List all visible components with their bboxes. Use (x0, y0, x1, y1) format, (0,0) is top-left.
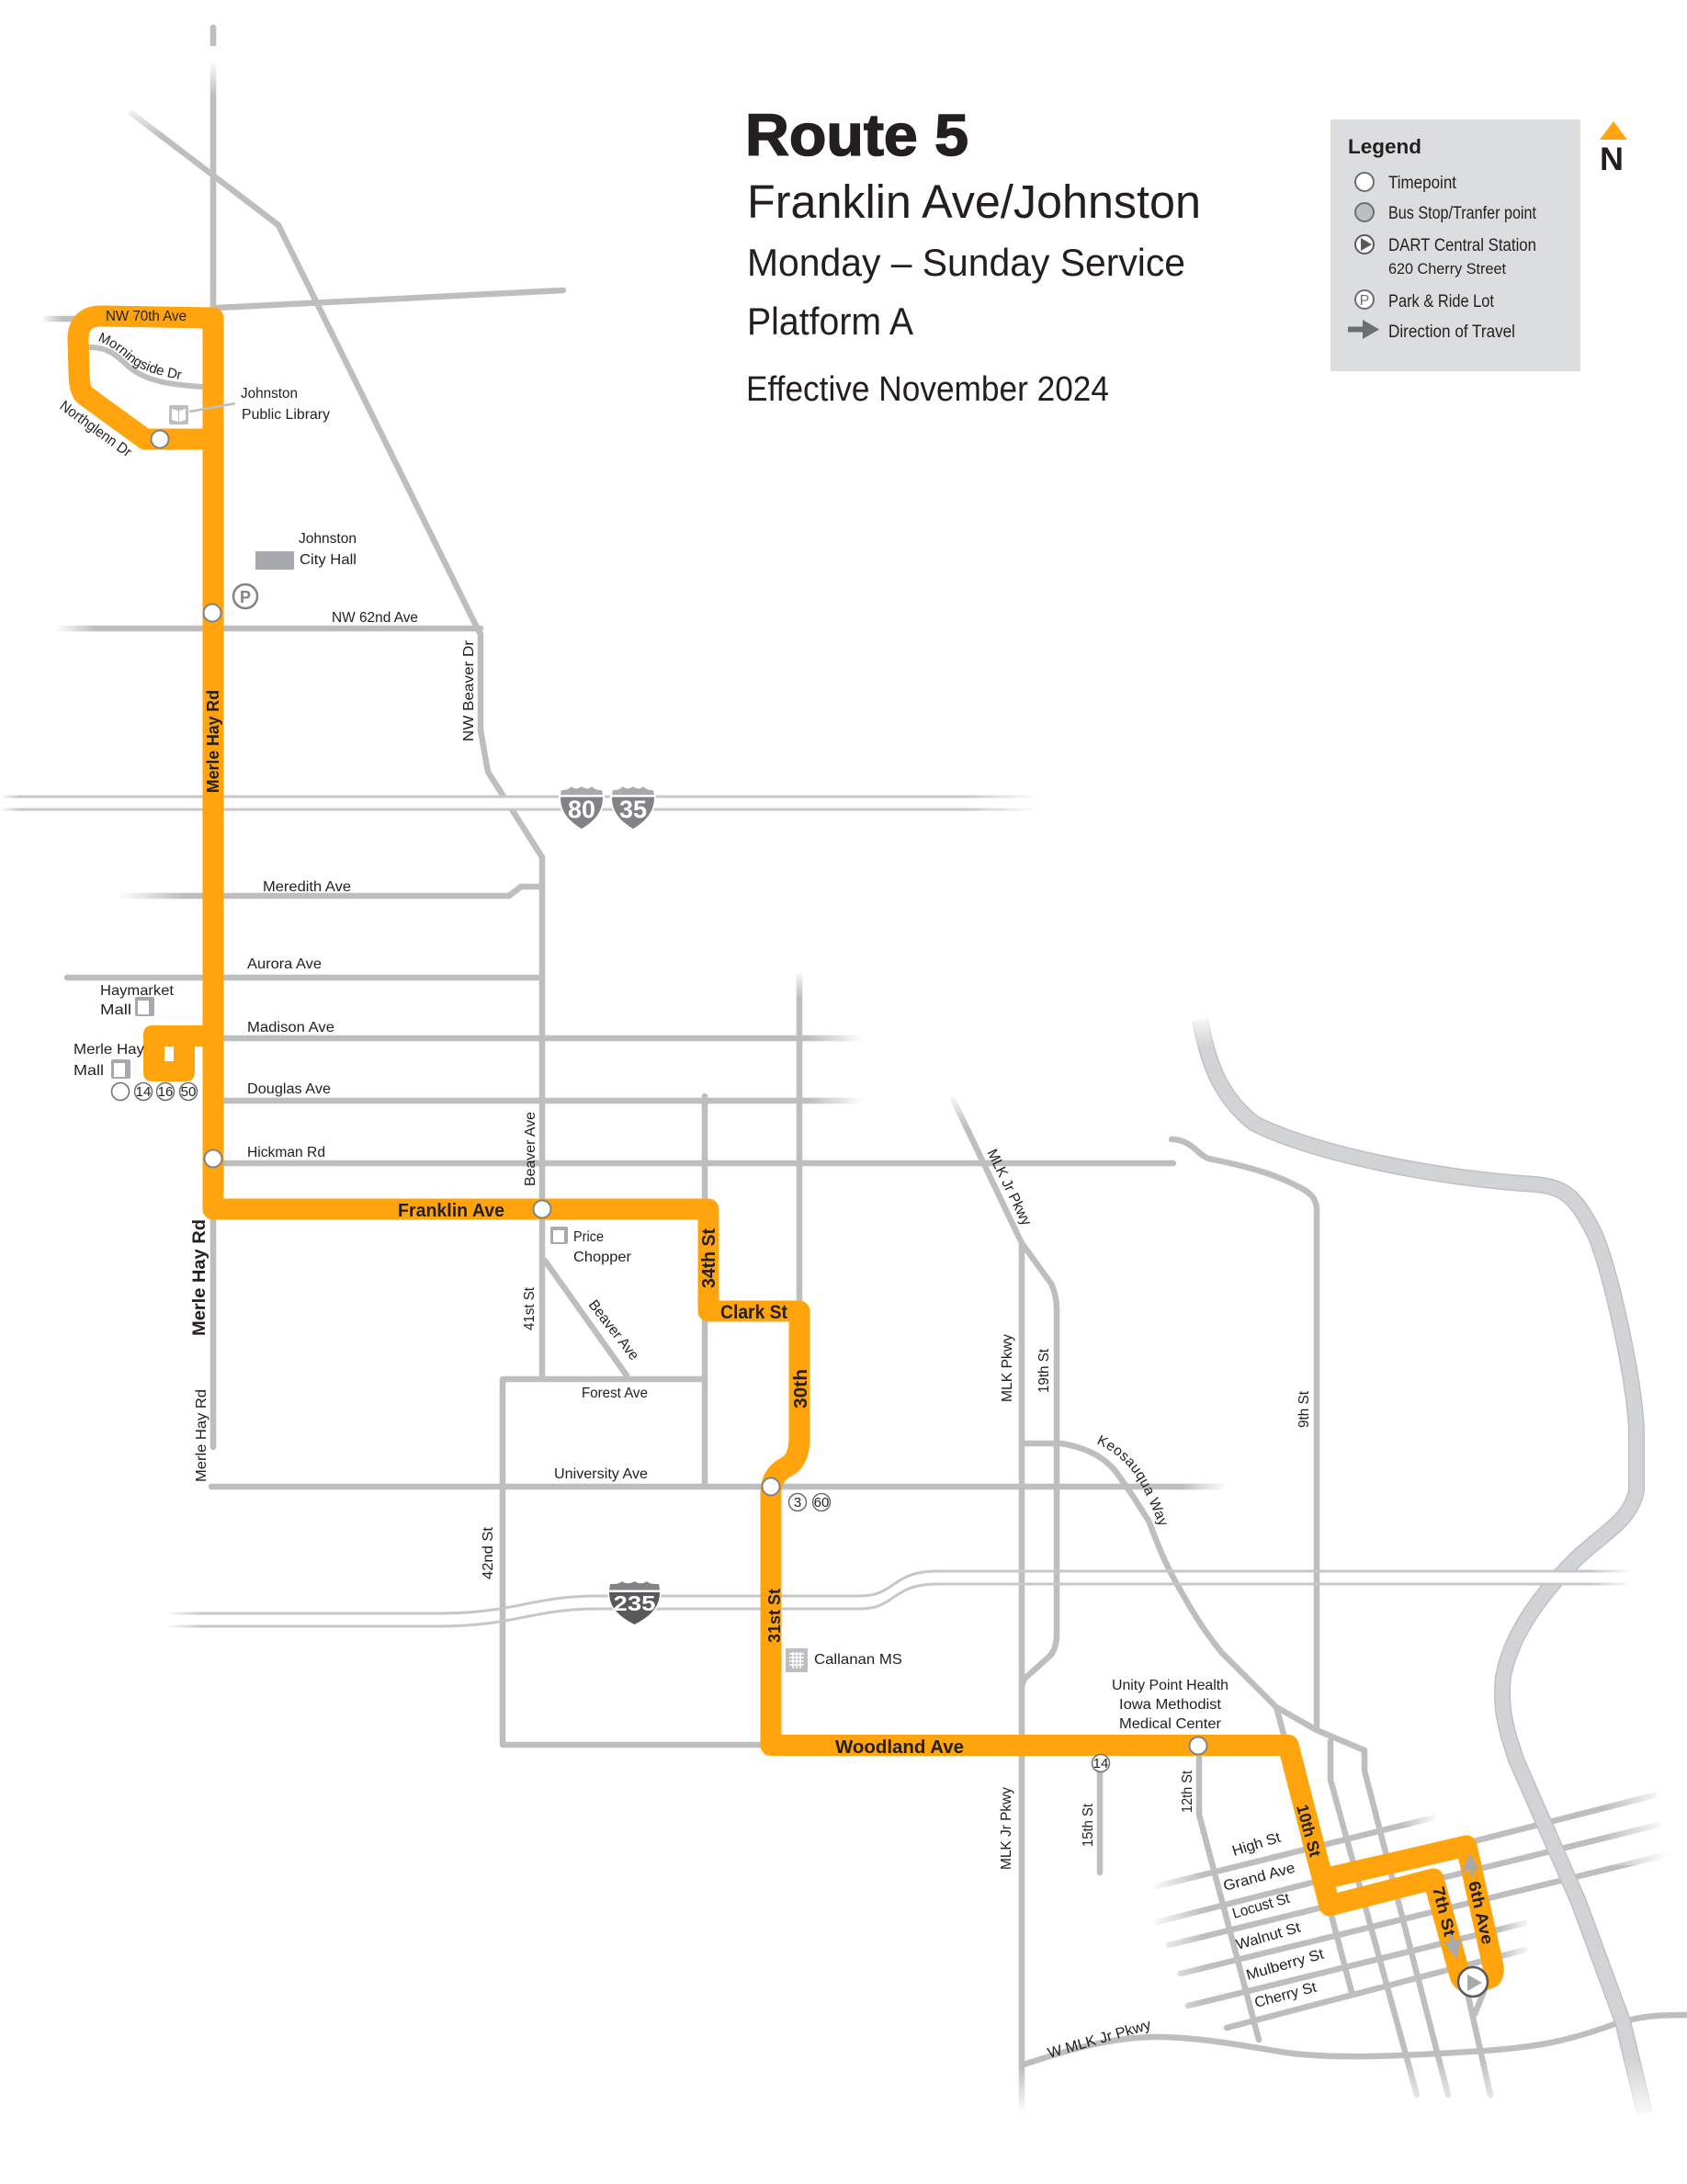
road labels: northwest: Douglas Ave (247, 1081, 331, 1097)
place labels: Johnston (241, 386, 298, 402)
interstate shield 35: 35 (619, 796, 647, 823)
title block: Platform A (747, 300, 913, 343)
interstate shield 235 (609, 1581, 660, 1624)
icon: park and ride: P (240, 588, 251, 606)
icon: Price Chopper (550, 1227, 568, 1244)
place labels (74, 386, 1228, 1732)
legend: DART Central Station: DART Central Station (1388, 236, 1536, 255)
direction arrow: 7th St southbound (1444, 1933, 1462, 1959)
legend: direction of travel: Direction of Travel (1388, 323, 1515, 342)
transfer circles: University Ave (788, 1494, 831, 1511)
direction arrow: 6th Ave northbound (1462, 1853, 1479, 1876)
place labels: Haymarket (100, 983, 175, 999)
title block: Franklin Ave/Johnston (747, 175, 1201, 228)
DART Central Station marker (1458, 1967, 1488, 1997)
icon: library (169, 403, 235, 424)
north arrow (1600, 121, 1627, 177)
transfer circles: University Ave: 3 (794, 1495, 801, 1511)
route street labels: 31st St (765, 1589, 784, 1643)
highway: I-235 east curve (1200, 1020, 1645, 2113)
legend: timepoint (1355, 173, 1457, 193)
place labels: Public Library (242, 407, 330, 423)
legend: bus stop: Bus Stop/Tranfer point (1388, 204, 1537, 223)
icon: park and ride (233, 584, 257, 608)
route street labels: 6th Ave (1465, 1879, 1497, 1946)
road labels: northwest: Morningside Dr (98, 333, 182, 379)
route street labels: 30th (791, 1369, 811, 1409)
legend: park and ride (1355, 290, 1495, 311)
road labels: east: 9th St (1296, 1390, 1312, 1428)
transfer circles: Merle Hay Mall (112, 1082, 197, 1101)
road labels: central: 41st St (522, 1286, 538, 1330)
road labels: northwest: NW 62nd Ave (332, 610, 418, 626)
road labels: downtown: High St (1230, 1830, 1283, 1860)
legend heading: Legend (1348, 135, 1421, 158)
transfer circles: Merle Hay Mall: 16 (158, 1084, 173, 1100)
route street labels: 34th St (699, 1228, 719, 1288)
road labels: downtown: Grand Ave (1222, 1861, 1296, 1895)
title block: Effective November 2024 (746, 370, 1109, 409)
road labels: northwest: Madison Ave (247, 1020, 334, 1035)
place labels: Medical Center (1119, 1716, 1222, 1732)
route street labels: NW 70th Ave (106, 309, 187, 324)
interstate shield 235: 235 (614, 1591, 656, 1615)
road labels: northwest (57, 333, 477, 1160)
timepoints (151, 430, 1207, 1755)
transfer circle: Woodland Ave: 14 (1093, 1756, 1108, 1771)
transfer circles: Merle Hay Mall: 14 (136, 1084, 151, 1100)
icon: Merle Hay Mall (111, 1059, 130, 1079)
road labels: downtown: Locust St (1230, 1891, 1292, 1922)
road labels: central: Merle Hay Rd (190, 1219, 209, 1336)
place labels: Mall (74, 1063, 104, 1079)
road labels: downtown: W MLK Jr Pkwy (1046, 2018, 1153, 2062)
north arrow: N (1600, 141, 1624, 177)
icon: Haymarket Mall (135, 997, 154, 1016)
place labels: Johnston (299, 531, 357, 547)
place labels: Chopper (573, 1250, 632, 1265)
title block: Route 5 (745, 102, 968, 168)
legend: timepoint: Timepoint (1388, 174, 1457, 193)
place labels: Callanan MS (814, 1652, 902, 1668)
road labels: northwest: Meredith Ave (263, 879, 351, 895)
place labels: City Hall (300, 552, 357, 568)
road labels: east: MLK Jr Pkwy (983, 1147, 1034, 1228)
road labels: northwest: Aurora Ave (247, 956, 322, 972)
legend: DART Central Station (1355, 235, 1536, 277)
legend: park and ride: Park & Ride Lot (1388, 292, 1495, 311)
legend panel (1330, 119, 1580, 371)
route street labels: 7th St (1429, 1884, 1459, 1938)
road labels: central: University Ave (554, 1466, 648, 1482)
route street labels: 10th St (1293, 1803, 1324, 1859)
road labels: east: 12th St (1180, 1770, 1195, 1813)
road labels: downtown (1046, 1830, 1326, 2062)
road labels: east (983, 1147, 1312, 1870)
route street labels: Merle Hay Rd (204, 690, 222, 793)
road labels: downtown: Walnut St (1234, 1919, 1303, 1953)
interstate shield 80: 80 (568, 796, 595, 823)
place labels: Unity Point Health (1112, 1678, 1228, 1693)
road labels: central: 42nd St (481, 1526, 496, 1579)
route 5 line (78, 316, 1493, 1983)
route street labels: Woodland Ave (835, 1737, 964, 1758)
road labels: downtown: Mulberry St (1244, 1946, 1326, 1984)
place labels: Merle Hay (74, 1042, 144, 1058)
place labels: Iowa Methodist (1119, 1697, 1222, 1713)
road labels: northwest: Hickman Rd (247, 1145, 325, 1160)
road labels: central: Merle Hay Rd (194, 1389, 209, 1482)
road labels: central: Beaver Ave (523, 1112, 538, 1186)
title block (745, 102, 1201, 409)
legend: park and ride: P (1360, 293, 1369, 309)
road labels: east: Keosauqua Way (1097, 1435, 1167, 1524)
route street labels: Clark St (720, 1302, 787, 1323)
legend: DART Central Station: 620 Cherry Street (1388, 260, 1506, 277)
road labels: east: MLK Jr Pkwy (999, 1787, 1014, 1870)
road labels: central (190, 1112, 648, 1579)
road labels: central: Forest Ave (582, 1386, 648, 1401)
road labels: central: Beaver Ave (585, 1297, 641, 1364)
icon: Johnston City Hall building (255, 551, 294, 570)
icon: Callanan MS (786, 1648, 808, 1672)
legend: bus stop (1355, 203, 1537, 223)
road labels: northwest: Northglenn Dr (57, 398, 135, 461)
road labels: east: MLK Pkwy (1000, 1334, 1015, 1402)
road labels: downtown: Cherry St (1253, 1979, 1319, 2011)
route street labels (106, 309, 1497, 1946)
road labels: northwest: NW Beaver Dr (461, 639, 477, 741)
highway: I-235 double lines (165, 1567, 1632, 1632)
highway: I-80/35 double lines (0, 790, 1038, 816)
place labels: Mall (100, 1002, 131, 1018)
transfer circles: Merle Hay Mall: 50 (181, 1084, 196, 1100)
interstate shield 35 (612, 786, 654, 829)
road labels: east: 15th St (1081, 1803, 1096, 1847)
road labels: east: 19th St (1036, 1348, 1052, 1393)
transfer circles: University Ave: 60 (814, 1495, 829, 1511)
legend: direction of travel (1348, 320, 1515, 342)
title block: Monday – Sunday Service (747, 241, 1185, 284)
route street labels: Franklin Ave (398, 1201, 504, 1221)
interstate shield 80 (560, 786, 603, 829)
place labels: Price (573, 1229, 604, 1245)
